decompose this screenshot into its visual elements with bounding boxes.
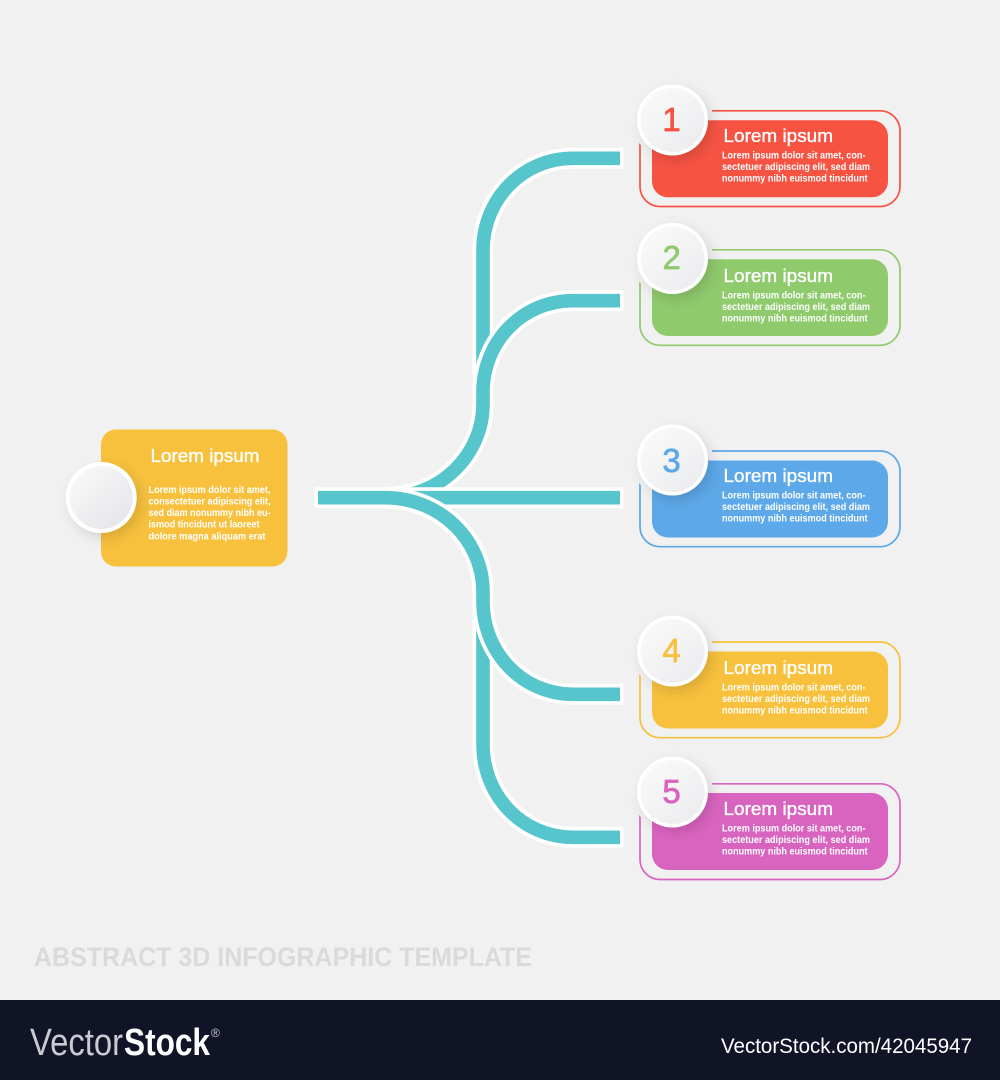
card 1 outline xyxy=(640,111,900,206)
card 3 panel xyxy=(652,460,888,538)
card 4 text: nonummy nibh euismod tincidunt xyxy=(722,706,868,717)
title: ABSTRACT 3D INFOGRAPHIC TEMPLATE xyxy=(34,942,532,972)
card 3 number badge xyxy=(637,424,708,496)
main card text: sed diam nonummy nibh eu- xyxy=(148,508,270,519)
main card text: consectetuer adipiscing elit, xyxy=(148,496,271,508)
card 3 number badge: 3 xyxy=(662,442,681,479)
main card text: Lorem ipsum dolor sit amet, xyxy=(148,485,271,496)
main card heading: Lorem ipsum xyxy=(150,446,260,466)
card 2 heading: Lorem ipsum xyxy=(724,266,833,286)
card 3 outline xyxy=(640,451,900,547)
card 2 text: sectetuer adipiscing elit, sed diam xyxy=(722,302,870,313)
card 3 text: sectetuer adipiscing elit, sed diam xyxy=(722,502,870,513)
card 4 number badge xyxy=(637,616,708,686)
footer logo: ® xyxy=(211,1026,220,1040)
main card xyxy=(66,430,288,566)
card 5 panel xyxy=(652,793,888,870)
card 5 text: nonummy nibh euismod tincidunt xyxy=(722,847,868,858)
main card panel xyxy=(101,430,288,566)
connector: branch 1 xyxy=(483,158,624,375)
card 2 number badge xyxy=(637,223,708,294)
main card text xyxy=(148,485,271,542)
card 4 outline xyxy=(640,642,900,738)
card 2 xyxy=(632,218,900,345)
card 5 text xyxy=(722,824,870,858)
card 3 heading: Lorem ipsum xyxy=(724,466,833,486)
card 2 panel xyxy=(652,259,888,336)
card 2 text: Lorem ipsum dolor sit amet, con- xyxy=(722,290,866,302)
card 2 number badge: 2 xyxy=(663,239,681,276)
footer logo xyxy=(30,1022,220,1064)
card 1 number badge: 1 xyxy=(662,101,681,138)
footer logo: Vector xyxy=(30,1022,123,1064)
card 1 number badge xyxy=(637,84,708,156)
connector: branch 3 and trunk xyxy=(314,487,624,508)
card 4 xyxy=(632,610,900,738)
card 3 text xyxy=(722,490,870,525)
card 3 text: nonummy nibh euismod tincidunt xyxy=(722,514,868,525)
card 1 text xyxy=(722,150,870,185)
card 2 text xyxy=(722,290,870,325)
card 4 panel xyxy=(652,652,888,728)
card 3 text: Lorem ipsum dolor sit amet, con- xyxy=(722,490,866,502)
card 4 text xyxy=(722,682,870,717)
card 1 text: Lorem ipsum dolor sit amet, con- xyxy=(722,150,866,162)
card 4 heading: Lorem ipsum xyxy=(724,658,833,678)
card 1 panel xyxy=(652,120,888,197)
card 5 xyxy=(632,752,900,880)
card 5 heading: Lorem ipsum xyxy=(724,799,833,819)
card 3 xyxy=(632,420,900,547)
main card text: ismod tincidunt ut laoreet xyxy=(148,520,260,530)
card 2 text: nonummy nibh euismod tincidunt xyxy=(722,314,868,325)
card 1 text: sectetuer adipiscing elit, sed diam xyxy=(722,162,870,173)
card 1 heading: Lorem ipsum xyxy=(724,126,833,146)
card 1 text: nonummy nibh euismod tincidunt xyxy=(722,174,868,185)
card 5 text: sectetuer adipiscing elit, sed diam xyxy=(722,835,870,846)
footer bar xyxy=(0,1000,1000,1080)
card 5 text: Lorem ipsum dolor sit amet, con- xyxy=(722,824,866,834)
connector: branch 4 xyxy=(385,498,624,694)
card 1 xyxy=(632,80,900,206)
card 4 text: sectetuer adipiscing elit, sed diam xyxy=(722,694,870,705)
connector: branch 2 xyxy=(385,301,624,498)
main card text: dolore magna aliquam erat xyxy=(148,532,266,542)
card 5 outline xyxy=(640,784,900,880)
card 5 number badge xyxy=(637,756,708,828)
connector tree xyxy=(314,158,624,837)
connector: branch 5 xyxy=(483,620,624,837)
main card circle xyxy=(66,462,137,533)
card 5 number badge: 5 xyxy=(662,773,681,810)
card 2 outline xyxy=(640,250,900,345)
card 4 text: Lorem ipsum dolor sit amet, con- xyxy=(722,682,866,694)
footer url: VectorStock.com/42045947 xyxy=(721,1035,972,1058)
card 4 number badge: 4 xyxy=(662,632,681,669)
footer logo: Stock xyxy=(124,1022,211,1064)
